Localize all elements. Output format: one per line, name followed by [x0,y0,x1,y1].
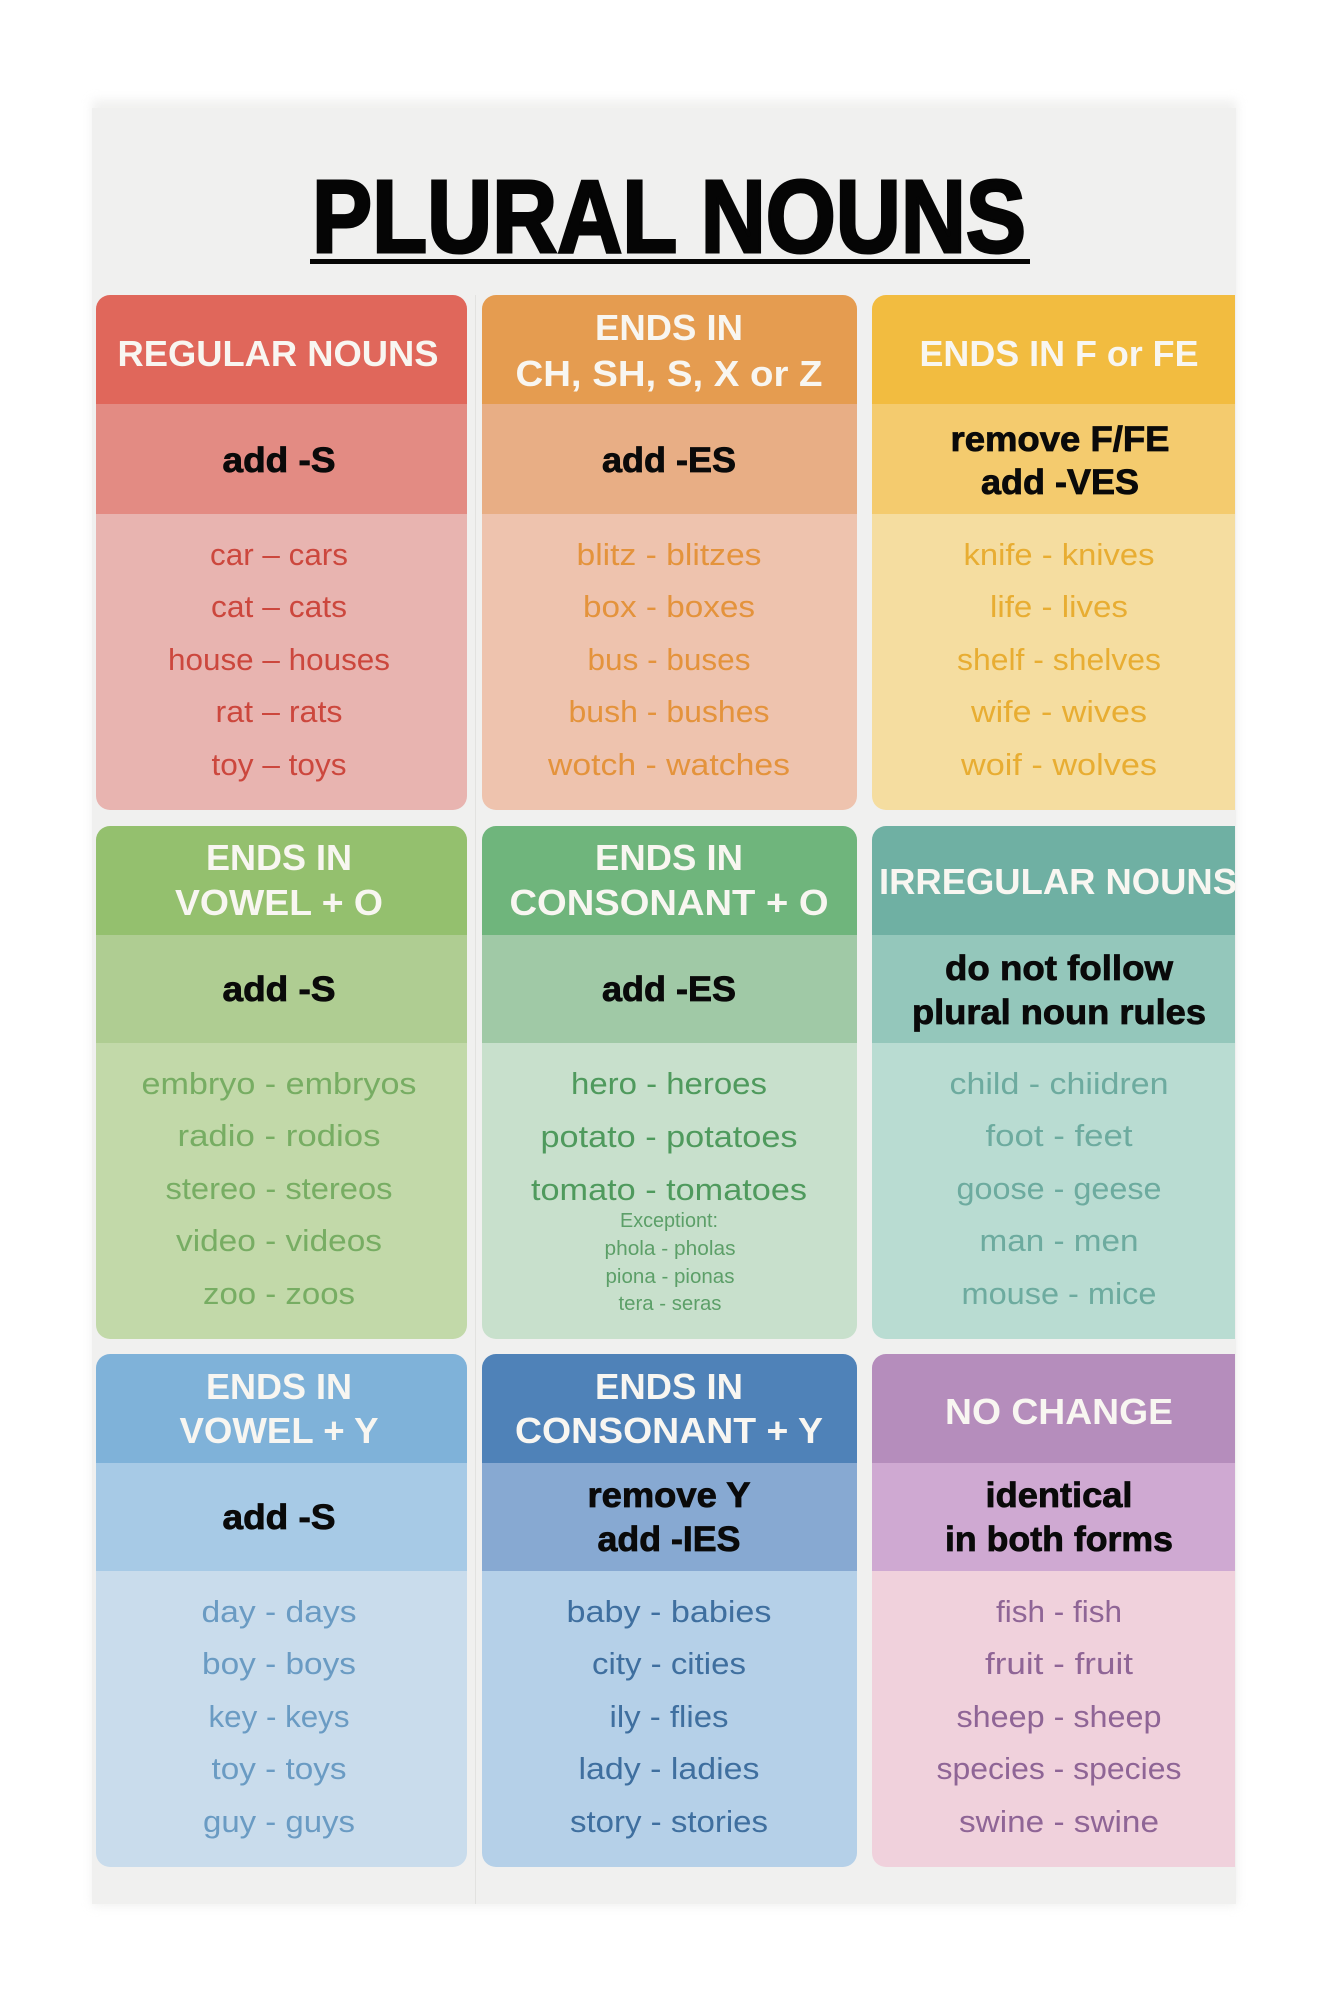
examples [96,514,467,810]
examples: zoo - zoos [203,1276,355,1311]
panel header [872,826,1237,935]
examples: knife - knives [964,537,1154,572]
rule band: add -ES [602,441,736,480]
panel header [482,1354,857,1463]
examples: city - cities [592,1646,746,1681]
panel: ends in ch, sh, s, x or z [482,295,857,810]
rule band [872,935,1235,1043]
panel: ends in f or fe [872,295,1235,810]
panel header [482,295,857,404]
panel header: ENDS IN [595,307,743,348]
examples [482,1043,857,1339]
examples: wotch - watches [547,747,790,782]
examples: baby - babies [566,1594,772,1629]
examples: house – houses [168,642,390,677]
rule band: add -VES [981,463,1139,502]
panel header [872,295,1235,404]
panel header: VOWEL + O [175,882,383,923]
panel header [96,295,467,404]
rule band [482,404,857,514]
rule band: add -S [222,970,336,1009]
panel header: ENDS IN [595,837,743,878]
examples [872,1043,1235,1339]
examples: box - boxes [583,589,755,624]
rule band: add -ES [602,970,736,1009]
panel header [482,826,857,935]
panel header: ENDS IN [206,1366,352,1407]
rule band [872,1463,1235,1571]
examples: goose - geese [956,1171,1162,1206]
panel header: NO CHANGE [945,1391,1173,1432]
panel header: VOWEL + Y [180,1410,378,1451]
examples: blitz - blitzes [576,537,762,572]
examples: boy - boys [202,1646,356,1681]
rule band [482,1463,857,1571]
panel: irregular nouns [872,826,1237,1339]
examples: car – cars [210,537,348,572]
panel header: ENDS IN [595,1366,743,1407]
examples [482,514,857,810]
examples: potato - potatoes [540,1119,798,1154]
rule band: identical [986,1476,1132,1515]
examples: rat – rats [216,694,342,729]
examples: ily - flies [610,1699,728,1734]
examples: sheep - sheep [956,1699,1162,1734]
rule band: remove F/FE [950,420,1170,459]
examples: Exceptiont: [620,1210,718,1232]
panel header: REGULAR NOUNS [118,333,438,374]
panel header: ENDS IN F or FE [920,333,1198,374]
examples: tomato - tomatoes [531,1172,807,1207]
examples: mouse - mice [962,1276,1156,1311]
rule band [96,1463,467,1571]
examples: bus - buses [588,642,750,677]
panel header: ENDS IN [206,837,352,878]
rule band [96,404,467,514]
examples [872,514,1235,810]
examples: bush - bushes [568,694,770,729]
examples: shelf - shelves [957,642,1161,677]
panel: ends in vowel + o [96,826,467,1339]
rule band: do not follow [945,949,1174,988]
rule band: plural noun rules [912,993,1206,1032]
rule band: in both forms [945,1520,1173,1559]
rule band: add -IES [598,1520,740,1559]
panel: ends in vowel + y [96,1354,467,1867]
examples: embryo - embryos [142,1066,416,1101]
examples: fruit - fruit [985,1646,1133,1681]
examples: toy – toys [212,747,346,782]
examples [96,1571,467,1867]
examples: life - lives [990,589,1128,624]
examples: radio - rodios [178,1118,380,1153]
panel: ends in consonant + o [482,826,857,1339]
examples: cat – cats [211,589,347,624]
examples: lady - ladies [578,1751,760,1786]
examples: swine - swine [959,1804,1159,1839]
examples: foot - feet [986,1118,1133,1153]
examples: child - chiidren [950,1066,1168,1101]
examples: story - stories [570,1804,768,1839]
panel header: CH, SH, S, X or Z [516,353,822,394]
panel: ends in consonant + y [482,1354,857,1867]
examples: guy - guys [203,1804,355,1839]
examples: piona - pionas [606,1266,734,1288]
examples: wife - wives [970,694,1147,729]
examples: day - days [202,1594,356,1629]
panel header [96,1354,467,1463]
examples: toy - toys [212,1751,346,1786]
panel header: CONSONANT + O [510,882,828,923]
examples [872,1571,1235,1867]
examples: video - videos [176,1223,382,1258]
examples: species - species [936,1751,1182,1786]
rule band: add -S [222,1498,336,1537]
panel header [872,1354,1235,1463]
rule band [872,404,1235,514]
examples: fish - fish [996,1594,1122,1629]
examples: woif - wolves [960,747,1157,782]
examples: hero - heroes [571,1066,767,1101]
panel header [96,826,467,935]
examples: phola - pholas [604,1238,736,1260]
panel header: IRREGULAR NOUNS [879,861,1237,902]
panel: regular nouns [96,295,467,810]
rule band: add -S [222,441,336,480]
examples [96,1043,467,1339]
poster background [92,100,1237,1906]
examples: stereo - stereos [166,1171,392,1206]
examples: man - men [980,1223,1138,1258]
examples [482,1571,857,1867]
title: PLURAL NOUNS [312,159,1026,274]
rule band: remove Y [588,1476,750,1515]
examples: tera - seras [618,1293,722,1315]
rule band [96,935,467,1043]
examples: key - keys [208,1699,350,1734]
panel header: CONSONANT + Y [515,1410,823,1451]
panel: no change [872,1354,1235,1867]
rule band [482,935,857,1043]
